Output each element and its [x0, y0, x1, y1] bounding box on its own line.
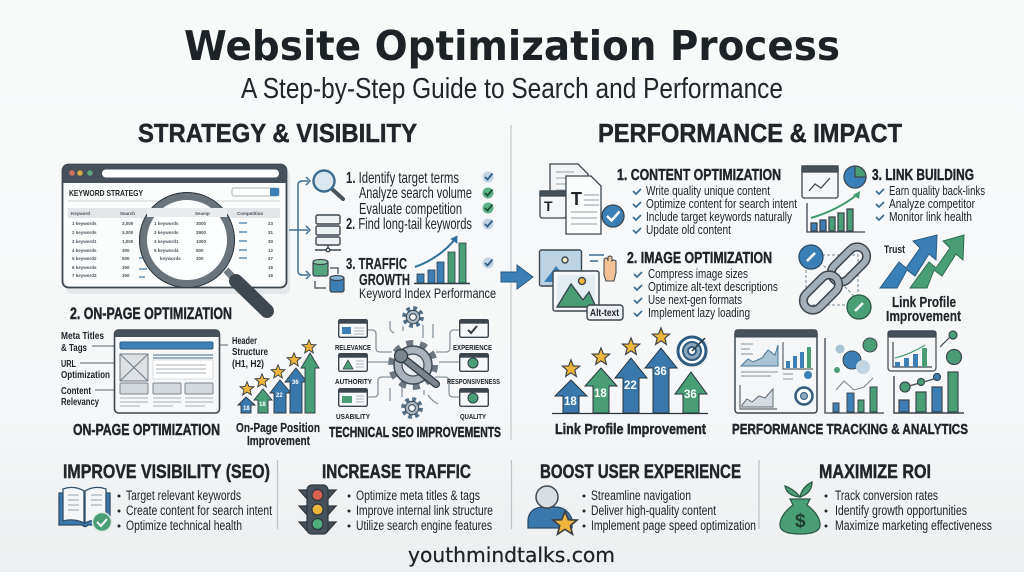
block: link building: [872, 167, 985, 224]
panel: keyword strategy browser: 5 keyword2: [72, 256, 97, 261]
label: link profile improvement (lower): Link Profile Improvement: [555, 421, 706, 438]
panel: maximize ROI: Track conversion rates: [835, 488, 938, 503]
chart: on-page position arrows: 22: [276, 393, 283, 399]
panel: improve visibility: Create content for search intent: [126, 503, 272, 518]
icon: large magnifying glass: 1000: [196, 239, 207, 244]
chart: link profile arrows: 18: [594, 388, 607, 400]
panel: keyword strategy browser: 31: [268, 230, 274, 235]
block: link building: Analyze competitor: [889, 196, 976, 211]
chart: on-page position arrows: [238, 340, 319, 413]
panel: keyword strategy browser: 3 keyword1: [72, 239, 97, 244]
icon: large magnifying glass: Seamp: [195, 211, 210, 216]
icon: large magnifying glass: 3 keyword1: [154, 239, 179, 244]
icon: content documents: T: [544, 198, 553, 214]
text block: keyword steps: 1. Identify target terms: [346, 170, 459, 187]
panel: keyword strategy browser: 16: [268, 273, 274, 278]
heading: performance and impact: PERFORMANCE & IMPACT: [598, 118, 902, 148]
block: link building: Monitor link health: [889, 209, 972, 224]
panel: improve visibility: IMPROVE VISIBILITY (SEO): [63, 461, 270, 483]
panel: maximize ROI: [780, 461, 992, 534]
panel: keyword strategy browser: 3,000: [122, 221, 134, 226]
icon: trust arrows: [880, 235, 964, 288]
labels: on-page elements: [61, 330, 268, 408]
icon: money bag with leaves: [780, 482, 820, 534]
block: image optimization: Implement lazy loading: [648, 305, 750, 320]
block: content optimization: [617, 167, 797, 237]
label: on-page optimization: ON-PAGE OPTIMIZATION: [73, 422, 220, 439]
block: link building: 3. LINK BUILDING: [872, 167, 974, 184]
chart: on-page position arrows: 18: [243, 406, 250, 412]
icon: book: [59, 487, 112, 532]
diagram: technical SEO: QUALITY: [460, 412, 486, 421]
panel: keyword strategy browser: Competition: [237, 211, 263, 216]
panel: analytics dashboard: [735, 330, 817, 413]
diagram: technical SEO: RELEVANCE: [335, 343, 371, 352]
title: Website Optimization Process: [184, 22, 840, 70]
chart: link profile arrows: 36: [654, 366, 667, 378]
labels: on-page elements: (H1, H2): [232, 358, 264, 370]
block: content optimization: Write quality unique content: [646, 183, 770, 198]
panel: keyword strategy browser: [62, 164, 290, 294]
diagram: technical SEO: EXPERIENCE: [453, 343, 492, 352]
panel: improve visibility: Optimize technical health: [126, 518, 242, 533]
block: content optimization: Optimize content for search intent: [646, 196, 797, 211]
block: content optimization: Include target keywords naturally: [646, 209, 792, 224]
panel: keyword strategy browser: 1,000: [122, 239, 134, 244]
labels: on-page elements: Header: [232, 335, 257, 347]
icon: large magnifying glass: 2900: [196, 230, 207, 235]
panel: maximize ROI: Identify growth opportunities: [835, 503, 967, 518]
arrows: keyword steps: [289, 177, 310, 279]
icon: large magnifying glass: 1 keywords: [154, 221, 179, 226]
panel: maximize ROI: MAXIMIZE ROI: [819, 461, 931, 483]
label: link profile improvement (upper): Link Profile: [892, 295, 956, 311]
panel: boost user experience: Deliver high-quality content: [591, 503, 716, 518]
diagram: technical SEO: [335, 308, 500, 421]
chart: link profile arrows: 22: [624, 380, 637, 392]
panel: improve visibility: Target relevant keywords: [126, 488, 241, 503]
panel: increase traffic: Improve internal link structure: [356, 503, 493, 518]
panel: keyword strategy browser: 300: [122, 273, 130, 278]
block: content optimization: 1. CONTENT OPTIMIZATION: [617, 167, 781, 184]
icon: analytics and pie: [802, 166, 866, 232]
labels: on-page elements: Structure: [232, 346, 268, 358]
panel: keyword strategy browser: 1 keywords: [72, 221, 97, 226]
labels: on-page elements: Content: [61, 385, 91, 397]
text block: keyword steps: [346, 170, 496, 301]
panel: keyword strategy browser: 27: [268, 256, 274, 261]
label: link profile improvement (upper): Improvement: [886, 309, 961, 325]
text block: keyword steps: Evaluate competition: [359, 201, 462, 218]
labels: on-page elements: & Tags: [61, 342, 87, 354]
panel: boost user experience: Implement page speed optimization: [591, 518, 756, 533]
label: technical SEO improvements: TECHNICAL SEO IMPROVEMENTS: [329, 425, 501, 441]
chart: analytics window and bars: [888, 331, 964, 413]
panel: on-page browser mockup: [114, 330, 220, 413]
panel: keyword strategy browser: 30: [268, 239, 274, 244]
diagram: technical SEO: AUTHORITY: [335, 377, 372, 386]
icon: content documents: [540, 164, 624, 234]
panel: keyword strategy browser: 23: [268, 221, 274, 226]
icon: user with star: [528, 486, 577, 534]
icon: large magnifying glass: 3 keywords: [154, 230, 179, 235]
block: image optimization: Use next-gen formats: [648, 292, 742, 307]
icon: large magnifying glass: [140, 192, 267, 311]
icon: databases: [313, 260, 344, 292]
panel: keyword strategy browser: KEYWORD STRATEGY: [69, 188, 143, 198]
panel: keyword strategy browser: 4 keywords: [72, 248, 97, 253]
panel: keyword strategy browser: 500: [122, 256, 130, 261]
labels: on-page elements: Meta Titles: [61, 330, 104, 342]
icon: money bag with leaves: $: [795, 511, 806, 532]
diagram: technical SEO: USABILITY: [336, 412, 370, 421]
panel: keyword strategy browser: 12: [268, 248, 274, 253]
icon: trust arrows: Trust: [884, 244, 905, 256]
labels: on-page elements: URL: [61, 358, 76, 370]
panel: improve visibility: [59, 461, 272, 533]
icon: server: [315, 215, 341, 252]
icon: image optimization: [540, 250, 623, 320]
labels: on-page elements: Optimization: [61, 369, 110, 381]
heading: on-page optimization: 2. ON-PAGE OPTIMIZATION: [70, 304, 232, 323]
footer URL: youthmindtalks.com: [408, 543, 615, 567]
chart: link profile arrows: [552, 328, 708, 414]
panel: increase traffic: [299, 461, 493, 534]
icon: small magnifier: [314, 170, 343, 199]
block: link building: Earn quality back-links: [889, 183, 985, 198]
text block: keyword steps: GROWTH: [359, 272, 410, 289]
chart: link profile arrows: 18: [564, 396, 577, 408]
panel: keyword strategy browser: 3,000: [122, 230, 134, 235]
icon: large magnifying glass: 3000: [196, 221, 207, 226]
panel: boost user experience: BOOST USER EXPERIENCE: [540, 461, 741, 483]
label: link profile improvement (upper): [886, 295, 961, 325]
text block: keyword steps: 3. TRAFFIC: [346, 256, 407, 273]
panel: boost user experience: [528, 461, 756, 534]
icon: large magnifying glass: 300: [196, 256, 204, 261]
label: on-page position improvement: On-Page Position: [236, 420, 320, 435]
icon: large magnifying glass: 5 keyword4: [154, 248, 179, 253]
chart: on-page position arrows: 18: [259, 402, 266, 408]
icons: check badges: [482, 172, 494, 268]
label: on-page position improvement: [236, 420, 320, 448]
text block: keyword steps: 2. Find long-tail keywords: [346, 216, 472, 233]
block: image optimization: Compress image sizes: [648, 266, 748, 281]
panel: keyword strategy browser: Keyword: [71, 211, 90, 216]
panel: keyword strategy browser: 300: [122, 248, 130, 253]
chart: traffic growth: [414, 236, 470, 284]
panel: keyword strategy browser: 2 keywords: [72, 230, 97, 235]
chart: scatter and bars: [825, 338, 884, 413]
chart: link profile arrows: 36: [684, 389, 697, 401]
label: on-page position improvement: Improvement: [247, 433, 311, 448]
text block: keyword steps: Keyword Index Performance: [359, 285, 496, 301]
block: image optimization: 2. IMAGE OPTIMIZATION: [627, 250, 772, 267]
icon: chain links: [799, 243, 871, 319]
arrow: left to right section: [501, 265, 533, 289]
panel: keyword strategy browser: 6 keywords: [72, 265, 97, 270]
heading: strategy and visibility: STRATEGY & VISIBILITY: [138, 118, 417, 148]
panel: keyword strategy browser: 300: [122, 265, 130, 270]
subtitle: A Step-by-Step Guide to Search and Performance: [241, 73, 783, 105]
icon: traffic light: [299, 485, 336, 534]
panel: increase traffic: Utilize search engine features: [356, 518, 492, 533]
panel: keyword strategy browser: Search: [120, 211, 135, 216]
diagram: technical SEO: RESPONSIVENESS: [447, 377, 500, 386]
icon: content documents: T: [571, 189, 582, 209]
panel: increase traffic: INCREASE TRAFFIC: [322, 461, 471, 483]
block: content optimization: Update old content: [646, 222, 731, 237]
icon: large magnifying glass: keywords: [160, 256, 181, 261]
labels: on-page elements: Relevancy: [61, 396, 99, 408]
panel: keyword strategy browser: 15: [268, 265, 274, 270]
panel: boost user experience: Streamline navigation: [591, 488, 691, 503]
icon: image optimization: Alt-text: [590, 307, 619, 319]
panel: increase traffic: Optimize meta titles & tags: [356, 488, 480, 503]
block: image optimization: [627, 250, 778, 320]
icon: large magnifying glass: 500: [196, 248, 204, 253]
chart: on-page position arrows: 36: [292, 380, 299, 386]
block: image optimization: Optimize alt-text descriptions: [648, 279, 778, 294]
text block: keyword steps: Analyze search volume: [359, 185, 472, 202]
panel: keyword strategy browser: 7 keyword3: [72, 273, 97, 278]
